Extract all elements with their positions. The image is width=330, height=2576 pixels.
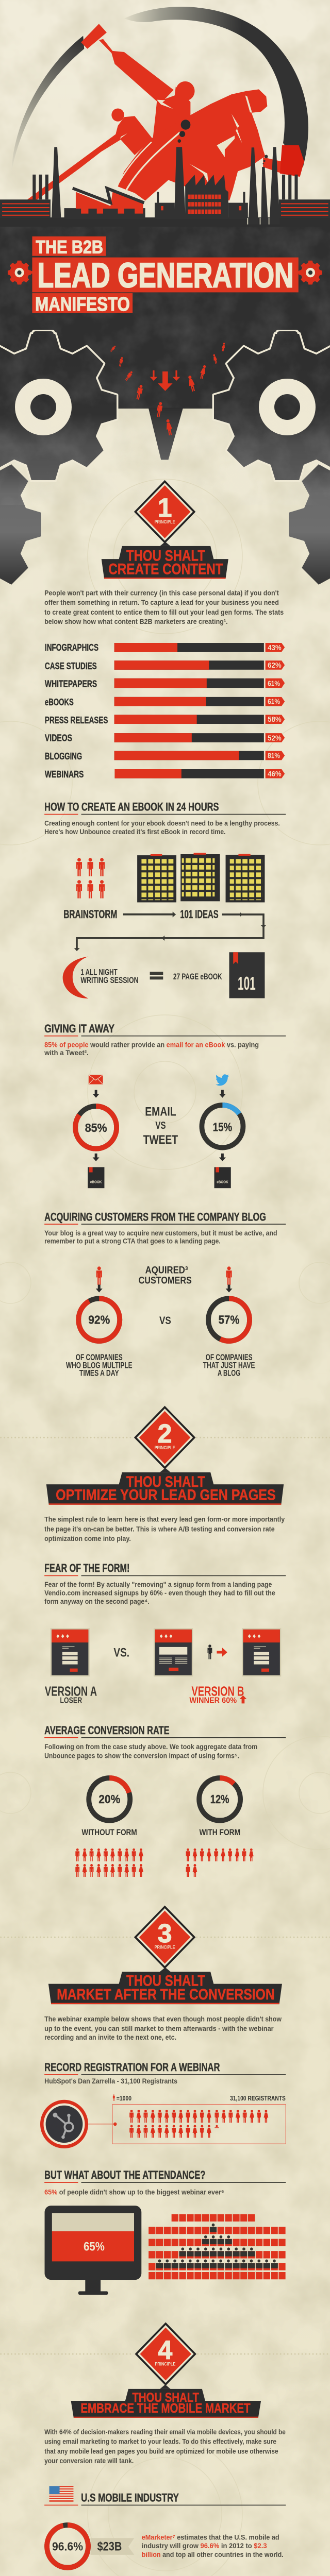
sickle blade left (11, 36, 84, 172)
bar: videos (45, 732, 285, 743)
arrows (93, 1090, 226, 1161)
heading: but what about the attendance: BUT WHAT ABOUT THE ATTENDANCE? (44, 2168, 205, 2181)
bar: whitepapers: 61% (268, 679, 280, 688)
principle 2 diamond (135, 1407, 194, 1468)
vs label: VS. (113, 1646, 129, 1659)
people with form (186, 1849, 254, 1877)
principle 4 diamond: PRINCIPLE (155, 2361, 175, 2366)
winner label: WINNER 60% (189, 1696, 237, 1705)
bar: webinars (45, 769, 285, 779)
intro text: People won't part with their currency (in this case personal data) if you don't (44, 589, 279, 597)
cream highlights on workers (118, 95, 252, 192)
icon: us flag (50, 2486, 73, 2502)
ebook icon left: eBOOK (90, 1179, 102, 1184)
title: manifesto: MANIFESTO (35, 293, 130, 315)
bar: webinars: WEBINARS (45, 769, 84, 779)
version a label: VERSION A (45, 1684, 97, 1699)
panel: principle 2 (1, 1360, 330, 1699)
giving it away text (44, 1041, 259, 1057)
banner: embrace the mobile market: EMBRACE THE MOBILE MARKET (80, 2401, 251, 2416)
heading: acquiring customers: ACQUIRING CUSTOMERS FROM THE COMPANY BLOG (44, 1210, 266, 1223)
aquired customers label (139, 1265, 192, 1286)
all night writing session label: 1 ALL NIGHT (80, 967, 118, 977)
heading: fear of the form: FEAR OF THE FORM! (44, 1562, 129, 1574)
principle 3 diamond: PRINCIPLE (155, 1944, 175, 1950)
bar: whitepapers (45, 678, 285, 689)
banner: market after the conversion (48, 1968, 282, 2004)
banner: thou shalt create content: CREATE CONTENT (108, 561, 223, 578)
funnel (148, 408, 183, 460)
header gears (0, 330, 330, 598)
donut 85%: 85% (85, 1121, 107, 1134)
bar: blogging (45, 751, 285, 761)
fear of the form text: form anyway on the second page⁴. (44, 1598, 150, 1605)
seats pictogram (148, 2218, 286, 2276)
fear of the form text (44, 1581, 275, 1605)
panel: giving it away and blog customers (44, 1022, 286, 1362)
donut 57%: 57% (219, 1313, 240, 1326)
attendance text: 65% of people didn't show up to the biggest webinar ever⁶ (44, 2188, 224, 2196)
title: the b2b: THE B2B (36, 237, 103, 258)
principle 4 text: your conversion rate will tank. (44, 2457, 134, 2465)
stat 96.6%: eMarketer⁷ estimates that the U.S. mobile ad (142, 2533, 279, 2541)
principle 3 text: up to the event, you can still market to them afterwards - with the webinar (44, 2025, 274, 2032)
bar: blogging: 81% (268, 751, 280, 760)
sickle blade right (124, 7, 308, 167)
people without form (75, 1849, 143, 1877)
crescent moon (63, 957, 88, 998)
donut 15% (202, 1105, 243, 1148)
heading: how to create an ebook: HOW TO CREATE AN EBOOK IN 24 HOURS (44, 800, 219, 813)
of companies labels: OF COMPANIES (206, 1352, 253, 1362)
ebook icon right: eBOOK (217, 1179, 228, 1184)
donut 20%: 20% (98, 1792, 121, 1806)
ebook text: Here's how Unbounce created it's first eBook in record time. (44, 828, 226, 836)
brainstorm flow (63, 908, 266, 951)
principle 2 diamond: 2 (158, 1418, 172, 1448)
blog caption right: A BLOG (218, 1368, 240, 1378)
fear of the form text: Vendio.com increased signups by 60% - even though they had to fill out the (44, 1589, 275, 1597)
donut 20% (89, 1778, 130, 1821)
ebook icon left (88, 1167, 104, 1188)
principle 3 text (44, 2015, 282, 2041)
bar: infographics: INFOGRAPHICS (45, 641, 98, 653)
stat 96.6%: industry will grow 96.6% in 2012 to $2.3 (142, 2542, 267, 2550)
dark ground band under the header (0, 217, 330, 409)
heading: average conversion rate: AVERAGE CONVERSION RATE (44, 1724, 170, 1737)
principle 4 text (44, 2428, 286, 2465)
blog caption right (203, 1360, 255, 1378)
panel: hero illustration and title (0, 7, 330, 315)
loser label: LOSER (60, 1696, 82, 1705)
heading: giving it away: GIVING IT AWAY (44, 1022, 115, 1035)
bar: ebooks (45, 697, 285, 707)
version b label: VERSION B (191, 1684, 244, 1699)
stat 96.6%: billion and top all other countries in the world. (142, 2551, 284, 2558)
conversion text: Following on from the case study above. We took aggregate data from (44, 1743, 257, 1751)
principle 3 diamond (135, 1907, 194, 1968)
intro text: below show how what content B2B marketers are creating¹. (44, 618, 228, 625)
bar: press releases: PRESS RELEASES (45, 715, 108, 725)
aquired customers label: AQUIRED³ (145, 1265, 188, 1276)
email vs tweet label: TWEET (143, 1133, 178, 1147)
red people falling into funnel (110, 343, 226, 436)
banner: embrace the mobile market (71, 2384, 261, 2418)
monitor with 65%: 65% (84, 2240, 105, 2253)
bar: case studies: CASE STUDIES (45, 660, 97, 671)
giving it away text: with a Tweet². (44, 1049, 89, 1057)
bar: whitepapers: WHITEPAPERS (45, 678, 97, 689)
email vs tweet label: EMAIL (145, 1105, 176, 1119)
email vs tweet label: VS (155, 1120, 166, 1131)
ebook icon right (214, 1167, 231, 1188)
principle 4 text: using email marketing to market to your leads. To do this effectively, make sure (44, 2438, 276, 2446)
principle 1 diamond: 1 (158, 493, 172, 522)
all night writing session label: WRITING SESSION (80, 975, 139, 985)
legend: =1000 (117, 2095, 131, 2102)
blog text: Your blog is a great way to acquire new customers, but it must be active, and (44, 1229, 277, 1237)
donut 57% (208, 1298, 250, 1341)
all night writing session label (80, 967, 139, 985)
ebook 101 cover (229, 952, 265, 998)
hubspot logo (40, 2100, 88, 2148)
with form label: WITH FORM (200, 1827, 240, 1837)
bar: videos: VIDEOS (45, 732, 72, 743)
click through arrow (207, 1645, 227, 1659)
banner: embrace the mobile market: THOU SHALT (132, 2391, 199, 2405)
principle 2 text (44, 1515, 285, 1543)
bar: ebooks: 61% (268, 698, 280, 706)
landing page version B step 2 (242, 1628, 281, 1676)
stat 96.6% (47, 2525, 284, 2568)
principle 3 text: recording and an invite to the next one, etc. (44, 2033, 176, 2041)
panel: principle 4 mobile (44, 2384, 288, 2576)
banner: thou shalt create content (102, 541, 228, 579)
bar: press releases: 58% (268, 715, 282, 724)
donut 12%: 12% (210, 1792, 229, 1806)
principle 4 text: With 64% of decision-makers reading their email via mobile devices, you should be (44, 2428, 286, 2436)
email vs tweet label (143, 1105, 178, 1147)
principle 2 text: The simplest rule to learn here is that every lead gen form-or more importantly (44, 1515, 285, 1523)
bar: infographics (45, 641, 285, 653)
banner: market after the conversion: MARKET AFTER THE CONVERSION (57, 1986, 275, 2003)
sticky note boards (137, 853, 265, 902)
bar: infographics: 43% (268, 643, 282, 652)
panel: content bars and ebook process (44, 678, 286, 998)
intro text: offer them something in return. To capture a lead for your business you need (44, 599, 279, 606)
registrants text: HubSpot's Dan Zarrella - 31,100 Registrants (44, 2077, 177, 2085)
fear of the form text: Fear of the form! By actually "removing" a signup form from a landing page (44, 1581, 272, 1588)
donut 12% (199, 1778, 240, 1821)
icon: envelope (89, 1075, 103, 1084)
principle 4 diamond (136, 2324, 195, 2384)
panel: principle 1 heading and intro (44, 343, 285, 671)
principle 4 diamond: 4 (158, 2335, 172, 2365)
banner: optimize your lead gen pages (46, 1468, 284, 1505)
banner: optimize your lead gen pages: THOU SHALT (126, 1474, 205, 1490)
heading: us mobile industry: U.S MOBILE INDUSTRY (81, 2491, 179, 2504)
ebook 101 cover: 101 (238, 974, 256, 994)
donut 15%: 15% (213, 1120, 232, 1134)
registrant total label: 31,100 REGISTRANTS (230, 2095, 286, 2102)
icon: twitter bird (216, 1074, 229, 1086)
legend (113, 2094, 131, 2102)
brainstorm flow: BRAINSTORM (63, 908, 117, 921)
panel: webinar registration and attendance (1, 2061, 330, 2384)
pictogram box: registrants (112, 2105, 286, 2144)
principle 4 text: that any mobile lead gen pages you build are optimized for mobile use otherwise (44, 2448, 278, 2455)
principle 1 diamond: PRINCIPLE (155, 519, 175, 524)
banner: optimize your lead gen pages: OPTIMIZE YOUR LEAD GEN PAGES (56, 1487, 276, 1504)
blog text: remember to put a strong CTA that goes to a landing page. (44, 1237, 221, 1245)
stat 96.6%: $23B (97, 2539, 122, 2554)
bar: ebooks: eBOOKS (45, 697, 74, 707)
landing page version B step 1 (154, 1628, 193, 1676)
connector (88, 2123, 117, 2126)
without form label: WITHOUT FORM (81, 1827, 137, 1837)
heading: record registration: RECORD REGISTRATION FOR A WEBINAR (44, 2061, 220, 2074)
donut 92%: 92% (88, 1313, 110, 1326)
principle 2 text: optimization come into play. (44, 1535, 131, 1543)
landing page version A (51, 1628, 90, 1676)
intro text (44, 589, 284, 625)
brainstorm flow: 101 IDEAS (180, 908, 219, 921)
factory skyline (0, 120, 330, 225)
bar: case studies: 62% (268, 661, 282, 670)
blog caption left: TIMES A DAY (79, 1368, 119, 1378)
bar: case studies (45, 660, 285, 671)
bar: blogging: BLOGGING (45, 751, 82, 761)
principle 3 diamond: 3 (158, 1918, 172, 1948)
blog text (44, 1229, 277, 1245)
customer icons (96, 1266, 233, 1293)
principle 3 text: The webinar example below shows that even though most people didn't show (44, 2015, 282, 2023)
vs label: VS (159, 1315, 171, 1327)
equals sign (150, 972, 163, 979)
principle 2 diamond: PRINCIPLE (155, 1445, 175, 1450)
title gears (8, 261, 322, 284)
banner: thou shalt create content: THOU SHALT (126, 548, 205, 565)
blog caption left: WHO BLOG MULTIPLE (66, 1360, 133, 1370)
donut 92% (78, 1298, 120, 1341)
bar: videos: 52% (268, 734, 282, 742)
aquired customers label: CUSTOMERS (139, 1275, 192, 1286)
panel: conversion rate and principle 3 (1, 1696, 330, 2041)
principle 1 diamond (135, 481, 194, 542)
stat 96.6%: 96.6% (52, 2540, 83, 2553)
six brainstorm people (76, 858, 105, 899)
conversion text (44, 1743, 257, 1759)
donut 85% (75, 1106, 117, 1149)
giving it away text: 85% of people would rather provide an email for an eBook vs. paying (44, 1041, 259, 1049)
banner: market after the conversion: THOU SHALT (126, 1973, 205, 1989)
principle 2 text: the page it's on-can be better. This is where A/B testing and conversion rate (44, 1525, 275, 1533)
bar: webinars: 46% (268, 770, 282, 778)
intro text: to create great content to entice them to fill out your lead gen forms. The stats (44, 608, 284, 616)
blog caption left (66, 1360, 133, 1378)
of companies labels: OF COMPANIES (76, 1352, 123, 1362)
workers silhouette (27, 24, 304, 200)
ebook text: Creating enough content for your ebook doesn't need to be a lengthy process. (44, 819, 280, 827)
of companies labels (76, 1352, 253, 1362)
bar: press releases (45, 715, 285, 725)
27 page ebook label: 27 PAGE eBOOK (173, 972, 222, 981)
monitor with 65% (45, 2206, 141, 2295)
conversion text: Unbounce pages to show the conversion impact of using forms⁵. (44, 1752, 239, 1759)
ebook text (44, 819, 280, 836)
blog caption right: THAT JUST HAVE (203, 1360, 255, 1370)
